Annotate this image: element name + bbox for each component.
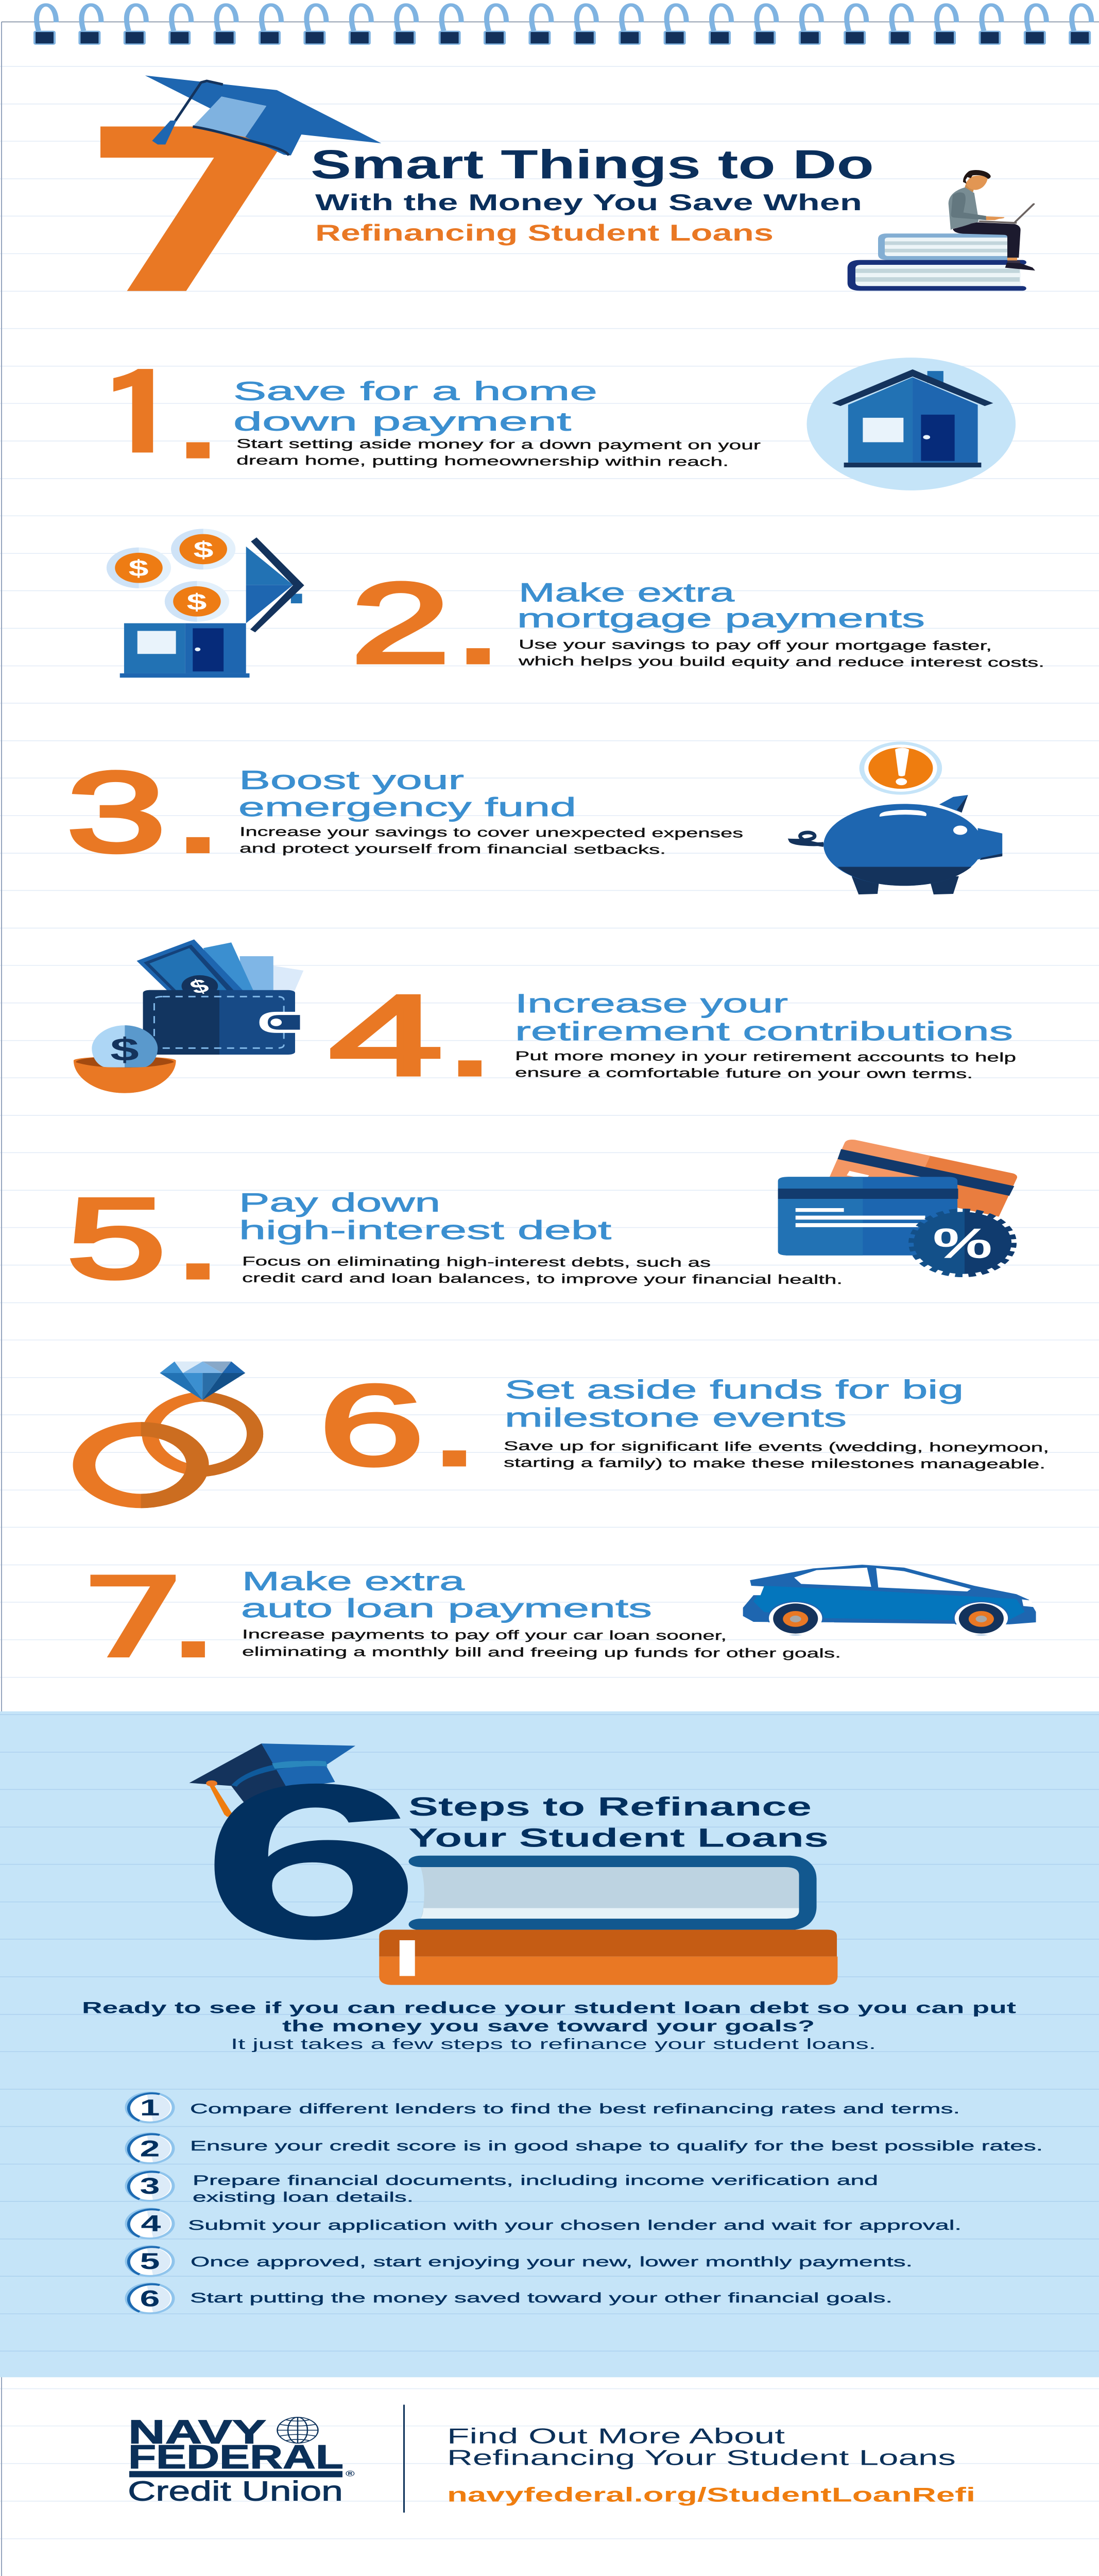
big orange number 7: 7 bbox=[79, 82, 304, 345]
Navy Federal Credit Union logo: NAVY bbox=[128, 2414, 266, 2451]
description 7: eliminating a monthly bill and freeing up funds for other goals. bbox=[242, 1644, 841, 1660]
number 6 bbox=[319, 1362, 479, 1489]
step 4 bbox=[127, 2209, 961, 2239]
number 6: 6 bbox=[319, 1362, 424, 1489]
step 2 bbox=[127, 2133, 1043, 2163]
big navy number 6: 6 bbox=[200, 1738, 422, 1985]
panel: item 4 retirement contributions bbox=[74, 939, 1016, 1099]
heading 6 bbox=[505, 1375, 964, 1432]
step 3 bbox=[127, 2171, 878, 2205]
section heading: Steps to Refinance bbox=[408, 1792, 812, 1821]
heading 2: Make extra bbox=[519, 578, 734, 607]
description 1 bbox=[236, 436, 761, 469]
number 4 bbox=[329, 972, 495, 1099]
call to action bbox=[447, 2424, 975, 2506]
number 5: 5 bbox=[66, 1175, 166, 1302]
cash dollar sign: $ bbox=[186, 975, 213, 998]
icon: wedding rings with diamond bbox=[73, 1362, 263, 1508]
icon: graduation cap on the 6 bbox=[189, 1743, 355, 1817]
heading 4 bbox=[515, 989, 1013, 1046]
heading 2 bbox=[517, 578, 925, 633]
panel: 6 steps to refinance bbox=[0, 1711, 1099, 2377]
step 5: Once approved, start enjoying your new, lower monthly payments. bbox=[191, 2253, 913, 2269]
call to action: Find Out More About bbox=[447, 2424, 785, 2448]
heading 1: Save for a home bbox=[233, 377, 597, 406]
nest egg dollar sign: $ bbox=[110, 1031, 139, 1068]
number 7: 7 bbox=[78, 1554, 188, 1682]
description 2 bbox=[518, 637, 1044, 670]
description 2: which helps you build equity and reduce interest costs. bbox=[518, 654, 1044, 670]
icon: stacked books bbox=[379, 1856, 837, 1985]
description 5: Focus on eliminating high-interest debts, such as bbox=[242, 1253, 711, 1269]
heading 2: mortgage payments bbox=[517, 604, 925, 633]
divider bbox=[403, 2405, 405, 2513]
step 1: Compare different lenders to find the best refinancing rates and terms. bbox=[190, 2100, 960, 2116]
Navy Federal Credit Union logo bbox=[128, 2414, 355, 2507]
section heading bbox=[408, 1792, 829, 1853]
heading 5: high-interest debt bbox=[239, 1215, 611, 1245]
step 2: 2 bbox=[140, 2136, 160, 2161]
heading 4: retirement contributions bbox=[515, 1017, 1013, 1046]
step 5: 5 bbox=[140, 2249, 160, 2274]
description 1: dream home, putting homeownership within reach. bbox=[236, 453, 729, 469]
intro text: the money you save toward your goals? bbox=[282, 2016, 815, 2035]
heading 6: milestone events bbox=[505, 1403, 847, 1432]
heading 1: down payment bbox=[233, 407, 571, 436]
description 7 bbox=[242, 1626, 841, 1660]
step 3: 3 bbox=[140, 2174, 160, 2199]
number 1: 1 bbox=[95, 357, 185, 470]
description 6: starting a family) to make these milestones manageable. bbox=[504, 1455, 1045, 1471]
number 5: . bbox=[173, 1175, 223, 1302]
step 4: 4 bbox=[141, 2211, 161, 2236]
heading 3 bbox=[238, 766, 576, 822]
description 4: Put more money in your retirement accounts to help bbox=[515, 1048, 1016, 1064]
description 5: credit card and loan balances, to improve your financial health. bbox=[242, 1270, 843, 1286]
intro text: It just takes a few steps to refinance your student loans. bbox=[231, 2036, 876, 2052]
step 1: 1 bbox=[140, 2095, 160, 2121]
number 2: . bbox=[453, 560, 503, 687]
icon: graduation cap on the 7 bbox=[145, 76, 381, 156]
icon: blue car bbox=[743, 1565, 1036, 1635]
heading 5 bbox=[239, 1188, 611, 1245]
panel: item 7 auto loan payments bbox=[78, 1552, 1036, 1682]
description 4: ensure a comfortable future on your own terms. bbox=[515, 1065, 973, 1081]
description 1: Start setting aside money for a down payment on your bbox=[236, 436, 761, 452]
coin dollar signs: $ bbox=[194, 537, 213, 563]
step 4: Submit your application with your chosen lender and wait for approval. bbox=[188, 2217, 961, 2233]
title: Refinancing Student Loans bbox=[315, 221, 774, 246]
number 4: . bbox=[445, 972, 495, 1099]
number 1: . bbox=[173, 353, 223, 481]
number 3: 3 bbox=[66, 748, 166, 875]
icon: piggy bank with alert bbox=[791, 741, 1002, 894]
call to action: navyfederal.org/StudentLoanRefi bbox=[447, 2483, 975, 2506]
heading 1 bbox=[233, 377, 597, 436]
description 2: Use your savings to pay off your mortgage faster, bbox=[519, 637, 992, 653]
panel: item 3 emergency fund bbox=[66, 741, 1002, 894]
heading 7 bbox=[241, 1567, 652, 1623]
description 3: Increase your savings to cover unexpected expenses bbox=[239, 824, 743, 840]
description 6: Save up for significant life events (wedding, honeymoon, bbox=[504, 1438, 1049, 1454]
coin dollar signs: $ bbox=[187, 589, 207, 615]
heading 5: Pay down bbox=[239, 1188, 440, 1217]
description 3 bbox=[239, 824, 743, 857]
step 5 bbox=[127, 2246, 913, 2276]
number 6: . bbox=[430, 1362, 479, 1489]
heading 3: Boost your bbox=[239, 766, 464, 795]
heading 7: auto loan payments bbox=[241, 1594, 652, 1623]
panel: item 1 save for a home down payment bbox=[95, 353, 1016, 490]
intro text: Ready to see if you can reduce your student loan debt so you can put bbox=[82, 1998, 1016, 2016]
panel: header bbox=[79, 76, 1035, 345]
panel: footer bbox=[128, 2405, 975, 2513]
heading 4: Increase your bbox=[515, 989, 788, 1018]
panel: item 6 milestone events bbox=[73, 1362, 1049, 1508]
number 1 bbox=[95, 353, 223, 481]
section heading: Your Student Loans bbox=[408, 1823, 829, 1853]
coin dollar signs bbox=[129, 537, 213, 615]
step 3: existing loan details. bbox=[193, 2189, 414, 2205]
step 6: 6 bbox=[140, 2286, 160, 2311]
description 7: Increase payments to pay off your car loan sooner, bbox=[242, 1626, 727, 1642]
panel: item 5 high-interest debt bbox=[66, 1140, 1017, 1302]
icon: open house with coins bbox=[107, 529, 304, 677]
step 6 bbox=[127, 2283, 892, 2313]
call to action: Refinancing Your Student Loans bbox=[447, 2445, 956, 2469]
number 7: . bbox=[168, 1552, 218, 1680]
description 6 bbox=[504, 1438, 1049, 1471]
description 4 bbox=[515, 1048, 1016, 1081]
heading 7: Make extra bbox=[242, 1567, 465, 1596]
number 2: 2 bbox=[351, 560, 451, 687]
step 3: Prepare financial documents, including income verification and bbox=[193, 2172, 878, 2188]
title: Smart Things to Do bbox=[311, 142, 874, 187]
heading 6: Set aside funds for big bbox=[505, 1375, 964, 1404]
icon: credit cards with percent badge bbox=[778, 1140, 1017, 1275]
number 3: . bbox=[173, 748, 223, 875]
icon: student with laptop on stack of books bbox=[848, 170, 1035, 291]
panel: item 2 extra mortgage payments bbox=[107, 529, 1044, 687]
step 1 bbox=[127, 2093, 960, 2123]
icon: credit cards with percent badge: % bbox=[933, 1219, 992, 1267]
step 2: Ensure your credit score is in good shape to qualify for the best possible rates. bbox=[190, 2138, 1043, 2154]
Navy Federal Credit Union logo: Credit Union bbox=[128, 2476, 343, 2507]
intro text bbox=[82, 1998, 1016, 2052]
Navy Federal Credit Union logo: FEDERAL bbox=[128, 2439, 344, 2476]
icon: wallet with cash and nest egg bbox=[74, 939, 303, 1093]
spiral binding rings bbox=[35, 5, 1091, 44]
title bbox=[311, 142, 874, 246]
icon: house in circle bbox=[807, 358, 1016, 490]
number 4: 4 bbox=[329, 972, 443, 1099]
description 3: and protect yourself from financial setbacks. bbox=[239, 841, 666, 857]
step 6: Start putting the money saved toward your other financial goals. bbox=[190, 2290, 892, 2306]
coin dollar signs: $ bbox=[129, 556, 148, 581]
description 5 bbox=[242, 1253, 843, 1286]
Navy Federal Credit Union logo: ® bbox=[346, 2470, 355, 2478]
title: With the Money You Save When bbox=[315, 190, 862, 215]
heading 3: emergency fund bbox=[238, 792, 576, 822]
